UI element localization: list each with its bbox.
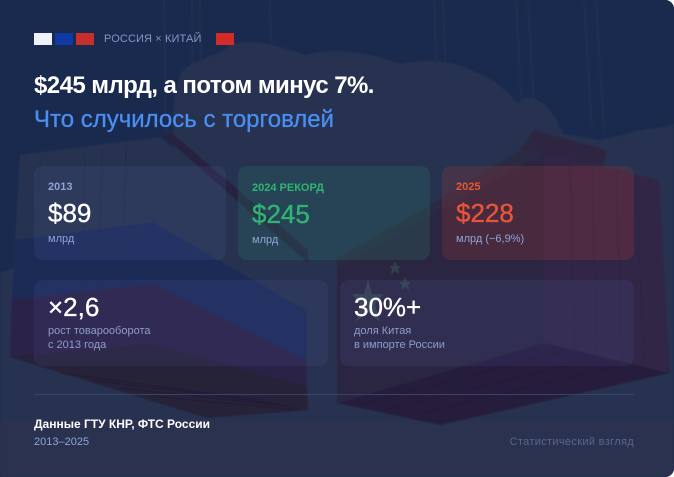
right container: side and front faces [337, 153, 544, 403]
panel: china share [340, 280, 634, 366]
year label: 2025 [456, 181, 480, 193]
value: $245 [252, 199, 310, 229]
panel: 2025 [442, 166, 634, 260]
year label: 2013 [48, 181, 72, 193]
description: рост товарооборота [48, 325, 150, 337]
value: $228 [456, 198, 514, 228]
panel: 2013 [34, 166, 226, 260]
description: с 2013 года [48, 339, 106, 351]
left container: underside [10, 343, 308, 418]
swatch: blue [55, 33, 73, 45]
value: $89 [48, 198, 91, 228]
subtitle: Что случилось с торговлей [34, 106, 334, 133]
flag swatches and kicker [34, 32, 234, 45]
description [48, 325, 150, 351]
unit: млрд (−6,9%) [456, 233, 524, 245]
panel: growth [34, 280, 328, 366]
panel: 2024 record [238, 166, 430, 260]
description [354, 325, 445, 351]
value: 30%+ [354, 292, 421, 322]
description: в импорте России [354, 339, 445, 351]
swatch: red [76, 33, 94, 45]
value: ×2,6 [48, 292, 99, 322]
kicker label: РОССИЯ × КИТАЙ [104, 33, 202, 45]
years: 2013–2025 [34, 436, 89, 448]
year label: 2024 РЕКОРД [252, 182, 324, 194]
swatch: china red [216, 33, 234, 45]
brand: Статистический взгляд [510, 436, 634, 448]
left container: front face [15, 137, 160, 240]
unit: млрд [252, 234, 278, 246]
unit: млрд [48, 233, 74, 245]
description: доля Китая [354, 325, 411, 337]
source: Данные ГТУ КНР, ФТС России [34, 417, 210, 431]
left container: side face [153, 137, 308, 310]
swatch: white [34, 33, 52, 45]
title: $245 млрд, а потом минус 7%. [34, 72, 374, 99]
stars on the right container [352, 261, 411, 322]
